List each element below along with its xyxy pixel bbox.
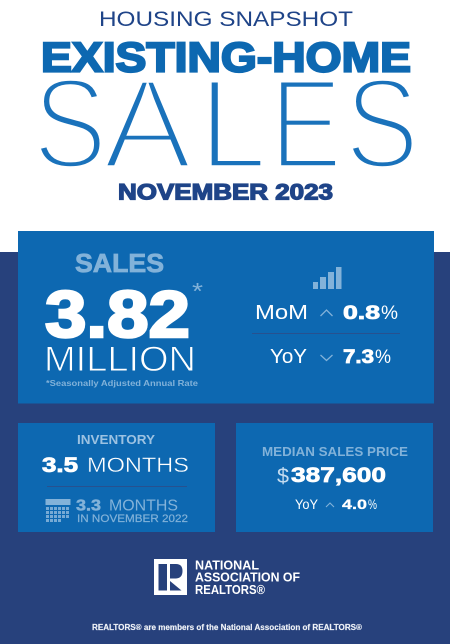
label: median sales price: MEDIAN SALES PRICE [262,445,408,459]
asterisk: * [192,278,203,304]
logo: national association of realtors [154,558,300,597]
heading: sales [33,53,419,196]
value: 3.5 months [42,453,189,477]
stat: price year over year [295,496,377,512]
value unit: million: MILLION [44,340,196,379]
stat: price year over year: YoY [295,496,319,512]
stat: year over year: 7.3 [343,346,374,368]
comparison: 3.3 months [76,498,188,525]
value: price: $ [277,464,289,488]
icon: realtor mark [154,559,187,595]
value: 3.82: 3.82 [45,277,190,351]
comparison: 3.3 months: 3.3 [76,498,101,514]
logo text: NATIONAL [195,558,259,572]
value: price [277,463,386,488]
footnote: *Seasonally Adjusted Annual Rate [46,378,198,388]
value: 3.5 months: 3.5 [42,454,78,477]
stat: month over month [255,302,398,324]
stat: month over month: MoM [255,302,308,324]
panel: inventory [18,423,215,532]
stat: year over year [270,346,391,368]
comparison: 3.3 months: IN NOVEMBER 2022 [77,513,188,525]
heading: sales: L [199,53,267,196]
comparison: 3.3 months: MONTHS [109,498,178,514]
stat: year over year: % [375,347,391,368]
icon: bar signal [313,267,342,289]
logo text: REALTORS® [195,583,266,597]
logo text [195,558,300,597]
panel: sales [18,231,434,404]
stat: price year over year: 4.0 [342,497,367,512]
heading: sales: S [33,53,107,196]
stat: month over month: 0.8 [343,302,380,324]
heading: sales: S [345,53,419,196]
stat: month over month: % [381,303,398,324]
title block [33,7,419,204]
logo text: ASSOCIATION OF [195,570,300,584]
label: sales: SALES [75,248,164,278]
heading: housing snapshot: HOUSING SNAPSHOT [99,7,353,31]
heading: sales: A [103,53,193,196]
panel: median sales price [236,423,433,532]
stat: year over year: YoY [270,346,307,368]
heading: november 2023: NOVEMBER 2023 [118,180,333,204]
value: price: 387,600 [291,463,386,487]
footer note: REALTORS® are members of the National Association of REALTORS® [92,623,362,632]
heading: existing-home: EXISTING-HOME [41,34,411,80]
stat: price year over year: % [368,497,377,512]
icon: calendar [46,499,70,522]
heading: sales: E [270,53,342,196]
label: inventory: INVENTORY [77,433,156,447]
value: 3.5 months: MONTHS [87,453,189,477]
